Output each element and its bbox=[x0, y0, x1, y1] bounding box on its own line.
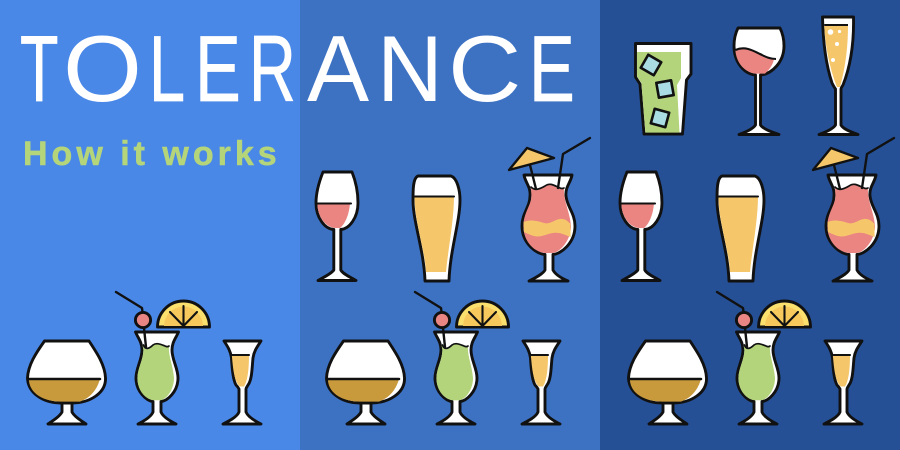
icon: liqueur glass, panel 2 bbox=[522, 341, 560, 424]
panel: high tolerance background bbox=[600, 0, 900, 450]
title: L bbox=[149, 16, 185, 121]
icon: green cocktail with cherry and lemon, panel 2 bbox=[415, 292, 508, 424]
icon: brandy snifter, panel 3 bbox=[628, 341, 707, 424]
icon: red wine glass, panel 3 bbox=[620, 172, 662, 280]
title: O bbox=[63, 16, 142, 121]
title: C bbox=[448, 16, 521, 121]
icon: liqueur glass, panel 3 bbox=[824, 341, 862, 424]
icon: tilted red wine glass, panel 3 bbox=[734, 28, 784, 134]
title bbox=[20, 16, 574, 121]
icon: green cocktail with cherry and lemon, panel 3 bbox=[717, 292, 810, 424]
icon: brandy snifter, panel 2 bbox=[326, 341, 405, 424]
panel: low tolerance background bbox=[0, 0, 300, 450]
icon: tall green drink with ice cubes, panel 3 bbox=[636, 44, 691, 134]
icon: beer glass, panel 2 bbox=[413, 176, 460, 281]
icon: green cocktail with cherry and lemon, panel 1 bbox=[116, 292, 210, 424]
icon: pink cocktail with umbrella, panel 3 bbox=[813, 138, 894, 281]
icon: liqueur glass, panel 1 bbox=[223, 341, 261, 424]
title: E bbox=[194, 16, 240, 121]
panel: medium tolerance background bbox=[300, 0, 600, 450]
icon: red wine glass, panel 2 bbox=[316, 172, 358, 280]
icon: brandy snifter, panel 1 bbox=[28, 341, 106, 424]
icon: beer glass, panel 3 bbox=[717, 176, 764, 281]
title: T bbox=[20, 16, 58, 121]
title: N bbox=[377, 16, 443, 121]
subtitle: How it works bbox=[23, 135, 281, 173]
title: E bbox=[528, 16, 574, 121]
icon: champagne flute with bubbles, panel 3 bbox=[819, 17, 858, 134]
title: A bbox=[307, 16, 369, 121]
title: R bbox=[249, 16, 296, 121]
icon: pink cocktail with umbrella, panel 2 bbox=[509, 138, 590, 281]
